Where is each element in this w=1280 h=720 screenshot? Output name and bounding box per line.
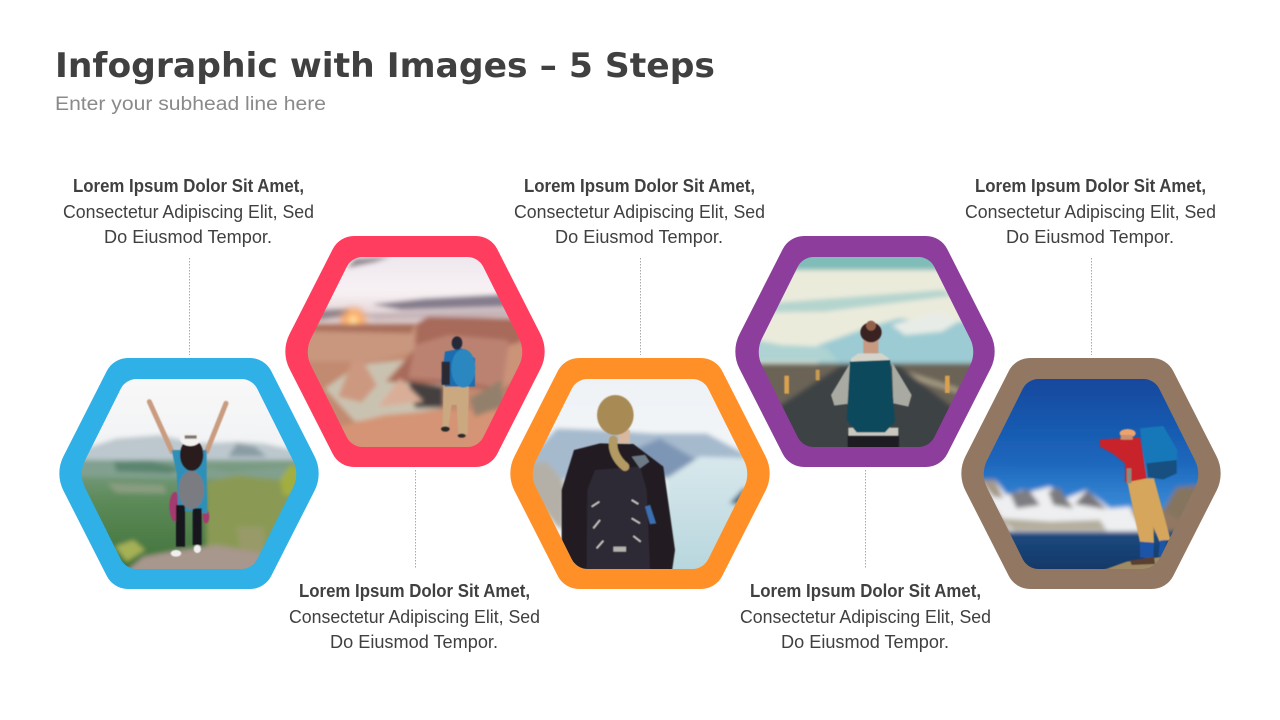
text block: step 1 [63, 176, 314, 247]
text block: step 1: Lorem Ipsum Dolor Sit Amet, [73, 176, 304, 196]
text block: step 1: Consectetur Adipiscing Elit, Sed [63, 202, 314, 222]
text block: step 4: Lorem Ipsum Dolor Sit Amet, [750, 581, 981, 601]
connector: step 2 [414, 470, 416, 568]
hexagon frame: step 5 brown [961, 358, 1221, 589]
text block: step 3 [514, 176, 765, 247]
text block: step 3: Lorem Ipsum Dolor Sit Amet, [524, 176, 755, 196]
text block: step 5 [965, 176, 1216, 247]
text block: step 5: Do Eiusmod Tempor. [1006, 227, 1174, 247]
text block: step 3: Do Eiusmod Tempor. [555, 227, 723, 247]
connector: step 3 [640, 258, 642, 355]
subhead: Enter your subhead line here [55, 94, 326, 115]
hexagon frame: step 1 blue [59, 358, 319, 589]
text block: step 2: Consectetur Adipiscing Elit, Sed [289, 607, 540, 627]
title: Infographic with Images – 5 Steps [55, 46, 715, 86]
text block: step 2: Do Eiusmod Tempor. [330, 632, 498, 652]
connector: step 1 [188, 258, 190, 355]
text block: step 4: Do Eiusmod Tempor. [781, 632, 949, 652]
text block: step 4: Consectetur Adipiscing Elit, Sed [740, 607, 991, 627]
text block: step 1: Do Eiusmod Tempor. [104, 227, 272, 247]
text block: step 2: Lorem Ipsum Dolor Sit Amet, [299, 581, 530, 601]
photo: hiker in red jacket by an alpine lake [984, 379, 1198, 569]
text block: step 4 [740, 581, 991, 652]
text block: step 5: Lorem Ipsum Dolor Sit Amet, [975, 176, 1206, 196]
connector: step 5 [1090, 258, 1092, 355]
connector: step 4 [864, 470, 866, 568]
hexagon frame: step 2 red [285, 236, 545, 467]
photo: traveller with backpack on a road [758, 257, 974, 447]
text block: step 5: Consectetur Adipiscing Elit, Sed [965, 202, 1216, 222]
hexagon frame: step 3 orange [510, 358, 770, 589]
photo: hiker at canyon sunset [308, 257, 522, 447]
text block: step 3: Consectetur Adipiscing Elit, Sed [514, 202, 765, 222]
text block: step 2 [289, 581, 540, 652]
photo: woman with raised arms on a mountain [82, 379, 296, 569]
hexagon frame: step 4 purple [735, 236, 995, 467]
photo: woman with braid and backpack above a fjord [532, 379, 748, 569]
